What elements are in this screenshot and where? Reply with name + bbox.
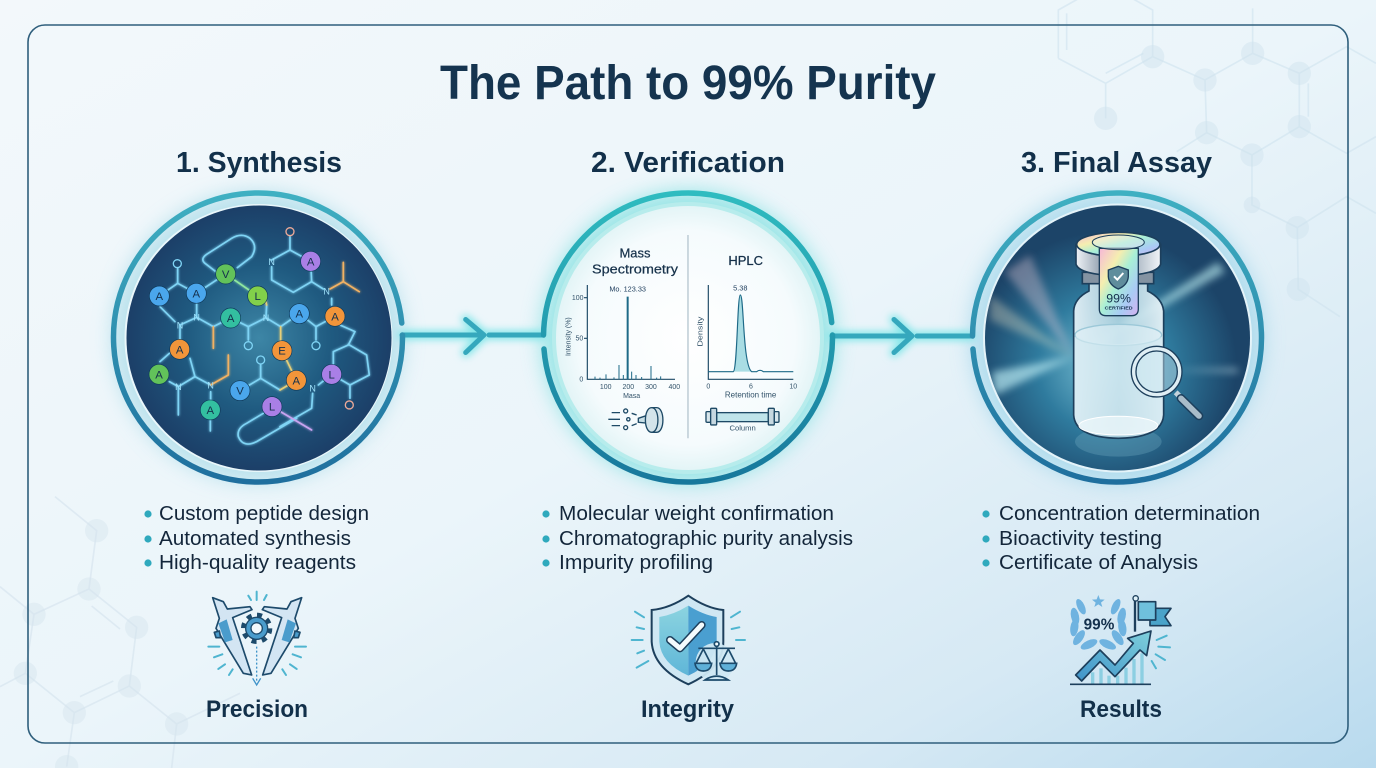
ring bbox=[114, 193, 403, 482]
peptide molecule diagram: V bbox=[222, 269, 230, 281]
label: integrity: Integrity bbox=[641, 696, 735, 723]
peptide molecule diagram: L bbox=[269, 402, 275, 414]
peptide molecule diagram: A bbox=[307, 256, 315, 268]
bullet list: final assay bbox=[982, 503, 1260, 574]
connector arrow: verification to final assay bbox=[832, 320, 972, 352]
bullet list: synthesis: Automated synthesis bbox=[159, 528, 351, 550]
label: precision: Precision bbox=[206, 696, 308, 723]
peptide molecule diagram: L bbox=[328, 369, 335, 381]
icon: precision calipers and gear bbox=[208, 592, 306, 685]
background molecule: top right bbox=[1058, 0, 1376, 317]
bullet list: final assay: Concentration determination bbox=[999, 503, 1260, 525]
peptide molecule diagram: A bbox=[331, 311, 339, 323]
peptide molecule diagram: A bbox=[296, 309, 304, 321]
peptide molecule diagram: A bbox=[227, 313, 235, 325]
HPLC chart: Retention time bbox=[725, 391, 777, 400]
peptide molecule diagram: A bbox=[207, 405, 215, 417]
peptide molecule diagram: A bbox=[176, 344, 184, 356]
vial bbox=[1074, 232, 1199, 457]
icon: results laurel flag and growth arrow bbox=[1069, 595, 1171, 684]
icon: ion source bbox=[608, 408, 663, 432]
mass spectrometry chart: 0 bbox=[579, 377, 583, 384]
connector arrow: synthesis to verification bbox=[402, 320, 543, 352]
peptide molecule diagram: N bbox=[263, 313, 269, 323]
background molecule: bottom left bbox=[0, 497, 240, 768]
mass spectrometry chart: Spectrometry bbox=[592, 261, 679, 276]
light rays bbox=[990, 255, 1238, 395]
peptide molecule diagram: A bbox=[193, 288, 201, 300]
HPLC chart: 10 bbox=[789, 384, 797, 391]
mass spectrometry chart: 100 bbox=[600, 384, 612, 391]
peptide molecule diagram: A bbox=[155, 369, 163, 381]
icon: results laurel flag and growth arrow: 99% bbox=[1084, 617, 1115, 634]
HPLC chart: 5.38 bbox=[733, 284, 747, 293]
mass spectrometry chart: 400 bbox=[668, 384, 680, 391]
holographic label bbox=[1092, 235, 1144, 316]
circle 3: final assay vial bbox=[973, 193, 1262, 482]
mass spectrometry chart: Masa bbox=[623, 393, 640, 400]
peptide molecule diagram: A bbox=[293, 375, 301, 387]
peptide molecule diagram: N bbox=[193, 313, 200, 323]
peptide molecule diagram: E bbox=[278, 346, 286, 358]
bullet list: verification: Molecular weight confirmation bbox=[559, 503, 834, 525]
mass spectrometry chart: 100 bbox=[572, 295, 584, 302]
HPLC chart: HPLC bbox=[728, 253, 763, 268]
vial cap bbox=[1082, 272, 1154, 284]
peptide molecule diagram: N bbox=[175, 382, 182, 392]
peptide molecule diagram: N bbox=[177, 320, 183, 330]
peptide molecule diagram: N bbox=[207, 380, 214, 390]
peptide molecule diagram bbox=[149, 228, 369, 444]
mass spectrometry chart: Mass bbox=[619, 245, 651, 260]
peptide molecule diagram: N bbox=[309, 384, 316, 394]
bullet list: verification bbox=[542, 503, 853, 574]
bullet list: final assay: Certificate of Analysis bbox=[999, 552, 1198, 574]
peptide molecule diagram: N bbox=[323, 286, 330, 296]
HPLC chart: Density bbox=[697, 316, 704, 347]
label: results: Results bbox=[1080, 696, 1162, 723]
peptide molecule diagram: N bbox=[268, 257, 275, 267]
circle glows bbox=[112, 190, 1264, 484]
ring bbox=[544, 193, 832, 335]
peptide molecule diagram: V bbox=[236, 386, 244, 398]
mass spectrometry chart: Intensity (%) bbox=[565, 317, 572, 356]
step 3 heading: 3. Final Assay bbox=[1021, 147, 1212, 179]
mass spectrometry chart: 200 bbox=[622, 384, 634, 391]
bullet list: synthesis: High-quality reagents bbox=[159, 552, 356, 574]
divider bbox=[686, 235, 690, 438]
mass spectrometry chart: 300 bbox=[645, 384, 657, 391]
holographic label: 99% bbox=[1106, 291, 1131, 305]
holographic label: CERTIFIED bbox=[1105, 305, 1133, 311]
icon: HPLC column bbox=[706, 408, 779, 433]
ring bbox=[973, 193, 1262, 482]
icon: integrity shield and scales bbox=[632, 596, 745, 684]
mass spectrometry chart: Mo. 123.33 bbox=[609, 284, 646, 293]
bullet list: synthesis: Custom peptide design bbox=[159, 503, 369, 525]
step 1 heading: 1. Synthesis bbox=[176, 147, 342, 179]
icon: HPLC column: Column bbox=[729, 424, 756, 433]
bullet list: final assay: Bioactivity testing bbox=[999, 528, 1162, 550]
magnifying glass bbox=[1131, 346, 1199, 416]
bullet list: synthesis bbox=[144, 503, 369, 574]
step 2 heading: 2. Verification bbox=[591, 147, 785, 179]
peptide molecule diagram: L bbox=[254, 291, 261, 303]
vial body bbox=[1074, 283, 1164, 438]
peptide molecule diagram: A bbox=[156, 291, 164, 303]
bullet list: verification: Chromatographic purity analysis bbox=[559, 528, 853, 550]
mass spectrometry chart bbox=[565, 245, 680, 400]
HPLC chart: 0 bbox=[706, 384, 710, 391]
circle 1: peptide synthesis bbox=[114, 193, 403, 482]
bullet list: verification: Impurity profiling bbox=[559, 552, 713, 574]
HPLC chart bbox=[697, 253, 797, 400]
title: The Path to 99% Purity bbox=[440, 57, 936, 110]
circle 2: verification instruments bbox=[544, 193, 833, 482]
HPLC chart: 6 bbox=[749, 384, 753, 391]
mass spectrometry chart: 50 bbox=[575, 336, 583, 343]
